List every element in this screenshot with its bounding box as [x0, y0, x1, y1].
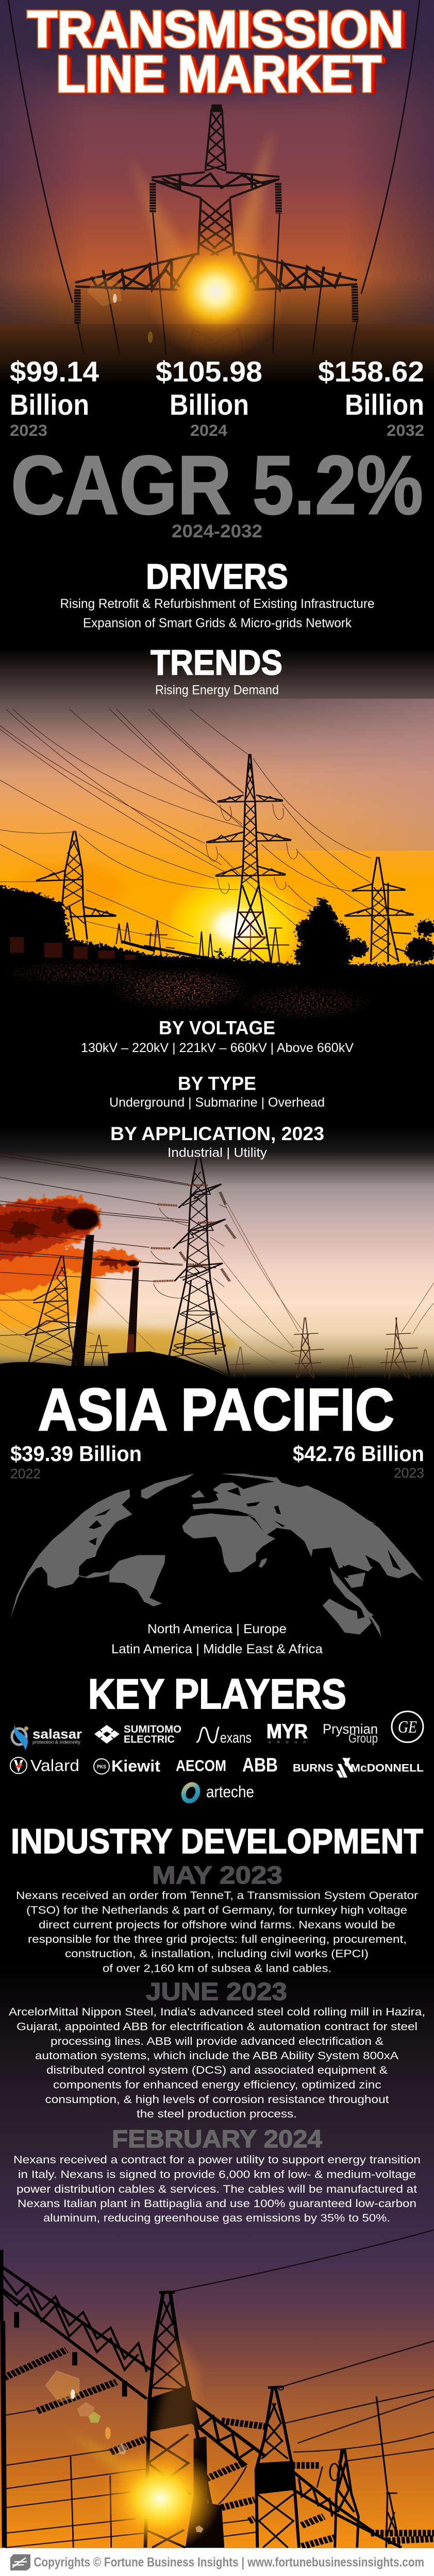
smoke clouds [0, 1196, 238, 1359]
other regions list: North America | Europe [147, 1622, 287, 1636]
development text: June 2023: distributed control system (DCS) and associated equipment & [46, 2063, 388, 2076]
right truss [188, 2399, 402, 2548]
title line two: LINE MARKET [61, 47, 386, 105]
second pylon [256, 2386, 299, 2548]
development text: May 2023: direct current projects for offshore wind farms. Nexans would be [39, 1918, 395, 1931]
logo: kiewit: Kiewit [111, 1757, 160, 1775]
development text: February 2024 [13, 2153, 421, 2224]
segment: by voltage [81, 1017, 354, 1055]
central pylon [145, 2292, 224, 2548]
logo: ABB: ABB [242, 1754, 278, 1776]
logo: burns mcdonnell: BURNS [293, 1761, 333, 1774]
date: February 2024: FEBRUARY 2024 [112, 2126, 322, 2153]
drivers block: Expansion of Smart Grids & Micro-grids Network [83, 617, 352, 631]
title line one: TRANSMISSION [27, 1, 404, 58]
stat: 2024 value: 2024 [190, 421, 227, 439]
wires [4, 2230, 434, 2548]
region heading: ASIA PACIFIC [38, 1376, 394, 1443]
logo: salasar: salasar [32, 1727, 82, 1742]
region value 2022: 2022 [10, 1466, 41, 1481]
date: June 2023: JUNE 2023 [146, 1978, 287, 2006]
hillside building and ground [0, 882, 434, 1079]
development text: June 2023: automation systems, which include the ABB Ability System 800xA [35, 2049, 398, 2062]
development text: May 2023 [16, 1889, 418, 1975]
development text: February 2024: Nexans received a contract for a power utility to support energy transition [13, 2153, 421, 2166]
trends block: Rising Energy Demand [155, 683, 279, 697]
stat: 2023 value: $99.14 [10, 355, 99, 387]
logo: GE: GE [398, 1718, 417, 1737]
overhead wires [0, 709, 371, 944]
third pylon [330, 2449, 358, 2548]
fourth mast [376, 2397, 400, 2548]
logo: burns mcdonnell: McDONNELL [350, 1761, 424, 1774]
chimneys [70, 1235, 94, 1380]
right pylon [345, 857, 414, 962]
region value 2022 [10, 1442, 142, 1481]
trends block [151, 642, 282, 697]
region value 2022: $39.39 Billion [10, 1442, 142, 1466]
logo: sumitomo electric [94, 1723, 181, 1745]
stat: 2023 value: 2023 [10, 421, 47, 439]
stat: 2032 value: Billion [345, 388, 424, 421]
panel: sunset photo with pylons [0, 648, 434, 1079]
development text: June 2023: Gujarat, appointed ABB for electrification & automation contract for steel [16, 2020, 418, 2033]
title line one: TRANSMISSION [27, 1, 404, 58]
stat: 2024 value: Billion [170, 388, 249, 421]
region value 2023: 2023 [394, 1465, 424, 1481]
region value 2023: $42.76 Billion [293, 1442, 424, 1466]
stat: 2032 value: $158.62 [318, 355, 424, 387]
stat: 2024 value [156, 355, 262, 439]
key players heading: KEY PLAYERS [88, 1671, 346, 1718]
stat: 2032 value [318, 355, 424, 439]
trends block: TRENDS [151, 642, 282, 682]
CAGR period: 2024-2032 [172, 521, 262, 541]
logo: MYR group: GROUP [269, 1741, 306, 1744]
logo: salasar [12, 1721, 82, 1751]
segment: by type: Underground | Submarine | Overhead [109, 1096, 325, 1110]
development text: June 2023: processing lines. ABB will provide advanced electrification & [51, 2035, 384, 2047]
ground and plant [0, 1351, 434, 1418]
logo: prysmian group [323, 1721, 378, 1745]
logo: sumitomo electric: SUMITOMO [124, 1723, 181, 1735]
date: May 2023: MAY 2023 [152, 1861, 282, 1889]
insulators [4, 2350, 434, 2547]
development text: February 2024: Nexans Italian plant in Battipaglia and use 100% guaranteed low-carbon [18, 2197, 416, 2210]
logo: prysmian group: Prysmian [323, 1721, 378, 1737]
world map globe [10, 1473, 424, 1637]
development text: February 2024: in Italy. Nexans is signed to provide 6,000 km of low- & medium-voltage [18, 2168, 416, 2181]
big truss [0, 2265, 151, 2399]
development text: May 2023: construction, & installation, including civil works (EPCI) [65, 1947, 369, 1960]
logo: nexans: exans [220, 1730, 252, 1746]
overhead wires [0, 1153, 188, 1335]
segment: by type: BY TYPE [178, 1073, 256, 1094]
left mast [1, 2250, 5, 2548]
development text: June 2023: ArcelorMittal Nippon Steel, India's advanced steel cold rolling mill in Hazira, [9, 2005, 425, 2018]
logo: MYR group: MYR [266, 1720, 308, 1743]
title line two: LINE MARKET [59, 46, 384, 104]
title [27, 1, 408, 105]
grass speckle [0, 960, 376, 1021]
logo: burns mcdonnell [293, 1758, 424, 1777]
lens flares and sun [46, 2371, 79, 2402]
left pylon [25, 1256, 76, 1366]
logo: nexans [196, 1727, 252, 1746]
title line one: TRANSMISSION [32, 2, 408, 59]
region value 2023 [293, 1442, 424, 1481]
development text: May 2023: (TSO) for the Netherlands & part of Germany, for turnkey high voltage [26, 1904, 407, 1917]
logo: arteche: arteche [206, 1783, 254, 1801]
panel: closing substation sunset illustration [0, 2228, 434, 2552]
development text: February 2024: aluminum, reducing greenhouse gas emissions by 35% to 50%. [43, 2211, 390, 2224]
development text: May 2023: of over 2,160 km of subsea & land cables. [103, 1962, 331, 1975]
logo: sumitomo electric: ELECTRIC [124, 1734, 175, 1745]
development text: June 2023: consumption, & high levels of corrosion resistance throughout [45, 2093, 389, 2106]
segment: by application [110, 1123, 324, 1160]
stat: 2032 value: 2032 [387, 421, 424, 439]
drivers block: Rising Retrofit & Refurbishment of Existing Infrastructure [60, 597, 374, 611]
segment: by application: BY APPLICATION, 2023 [110, 1123, 324, 1144]
segment: by voltage: 130kV – 220kV | 221kV – 660kV | Above 660kV [81, 1041, 354, 1055]
stat: 2023 value [10, 355, 99, 439]
other regions list: Latin America | Middle East & Africa [111, 1642, 323, 1656]
logo: salasar: protection & indemnity [32, 1740, 81, 1744]
drivers block: DRIVERS [146, 556, 288, 596]
panel: hero sunset photo with pylon [0, 0, 434, 385]
icon: fortune business insights logo [10, 2554, 30, 2570]
central pylon [206, 754, 297, 964]
segment: by type [109, 1073, 325, 1110]
development text: May 2023: responsible for the three grid projects: full engineering, procurement, [28, 1933, 407, 1945]
logo: GE [392, 1711, 423, 1742]
logo: arteche [181, 1782, 254, 1803]
footer strip [0, 2548, 434, 2576]
logo: prysmian group: Group [348, 1732, 378, 1745]
title line two: LINE MARKET [56, 45, 381, 103]
segment: by application: Industrial | Utility [168, 1146, 268, 1160]
stat: 2024 value: $105.98 [156, 355, 262, 387]
trees [216, 899, 434, 970]
title line one: TRANSMISSION [30, 1, 406, 59]
development text: June 2023: components for enhanced energy efficiency, optimized zinc [53, 2078, 381, 2091]
panel: industry development background [0, 1964, 434, 2238]
other regions list [111, 1622, 323, 1656]
left pylon [36, 831, 116, 939]
logo: valard: Valard [30, 1756, 79, 1774]
stat: 2023 value: Billion [10, 388, 89, 421]
development text: May 2023: Nexans received an order from TenneT, a Transmission System Operator [16, 1889, 418, 1902]
development text: February 2024: power distribution cables & services. The cables will be manufactured at [16, 2182, 417, 2195]
logo: kiewit: PKS [97, 1765, 106, 1770]
title line two: LINE MARKET [56, 45, 381, 103]
main pylon [169, 1157, 230, 1377]
development text: June 2023 [9, 2005, 425, 2120]
panel: smokestack photo with pylons [0, 1127, 434, 1418]
development text: June 2023: the steel production process. [137, 2107, 297, 2120]
segment: by voltage: BY VOLTAGE [159, 1017, 275, 1039]
distant pylons [116, 920, 289, 962]
drivers block [60, 556, 374, 631]
logo: AECOM: AECOM [176, 1757, 226, 1774]
logo: valard [10, 1756, 79, 1774]
far-right pylons [230, 1317, 432, 1380]
